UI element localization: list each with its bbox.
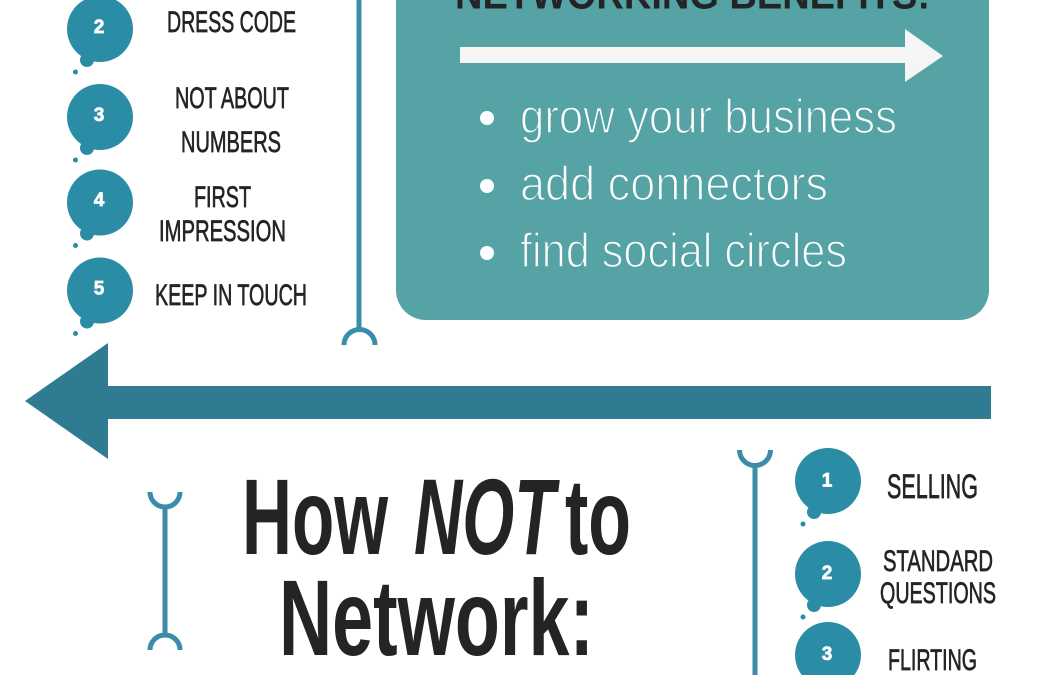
bullet list: benefits: add connectors bbox=[520, 158, 828, 211]
list: what not to do bbox=[795, 448, 996, 675]
bullet list: benefits: grow your business bbox=[520, 91, 897, 144]
bullet list: benefits bbox=[480, 91, 897, 278]
item 2: standard questions bbox=[795, 541, 996, 620]
tip 3: not about numbers bbox=[67, 82, 289, 162]
tip 5: keep in touch: KEEP IN TOUCH bbox=[155, 279, 307, 312]
tip 2: dress code bbox=[67, 0, 296, 74]
arrow: large left bbox=[25, 343, 991, 459]
item 1: selling: 1 bbox=[822, 470, 833, 492]
tip 3: not about numbers: 3 bbox=[94, 105, 104, 126]
item 1: selling bbox=[795, 448, 978, 526]
item 3: flirting bbox=[795, 622, 977, 675]
title: how not to network: Network: bbox=[279, 557, 594, 675]
tip 4: first impression: IMPRESSION bbox=[159, 215, 286, 248]
vertical divider: top section bbox=[344, 0, 375, 345]
bullet list: benefits: find social circles bbox=[520, 225, 847, 278]
title: how not to network bbox=[242, 456, 631, 675]
item 2: standard questions: QUESTIONS bbox=[880, 577, 996, 610]
title: how not to network: How bbox=[242, 456, 389, 577]
tip 4: first impression: 4 bbox=[94, 190, 105, 211]
arrow: white right bbox=[460, 29, 943, 82]
tip 2: dress code: DRESS CODE bbox=[167, 6, 296, 39]
ornament: left bracket bbox=[150, 492, 180, 650]
item 1: selling: SELLING bbox=[887, 468, 978, 506]
list: networking tips bbox=[67, 0, 307, 336]
tip 4: first impression: FIRST bbox=[194, 181, 251, 214]
tip 3: not about numbers: NUMBERS bbox=[181, 126, 281, 159]
item 2: standard questions: STANDARD bbox=[883, 545, 993, 578]
tip 5: keep in touch: 5 bbox=[94, 278, 105, 300]
item 3: flirting: 3 bbox=[822, 644, 832, 665]
tip 2: dress code: 2 bbox=[94, 17, 104, 38]
tip 5: keep in touch bbox=[67, 258, 307, 336]
title: how not to network: to bbox=[565, 456, 631, 577]
title: how not to network: NOT bbox=[414, 456, 560, 577]
item 2: standard questions: 2 bbox=[822, 563, 832, 584]
tip 3: not about numbers: NOT ABOUT bbox=[175, 82, 289, 115]
tip 4: first impression bbox=[67, 170, 286, 248]
panel: networking benefits bbox=[396, 0, 989, 320]
vertical divider: bottom section bbox=[739, 450, 770, 675]
